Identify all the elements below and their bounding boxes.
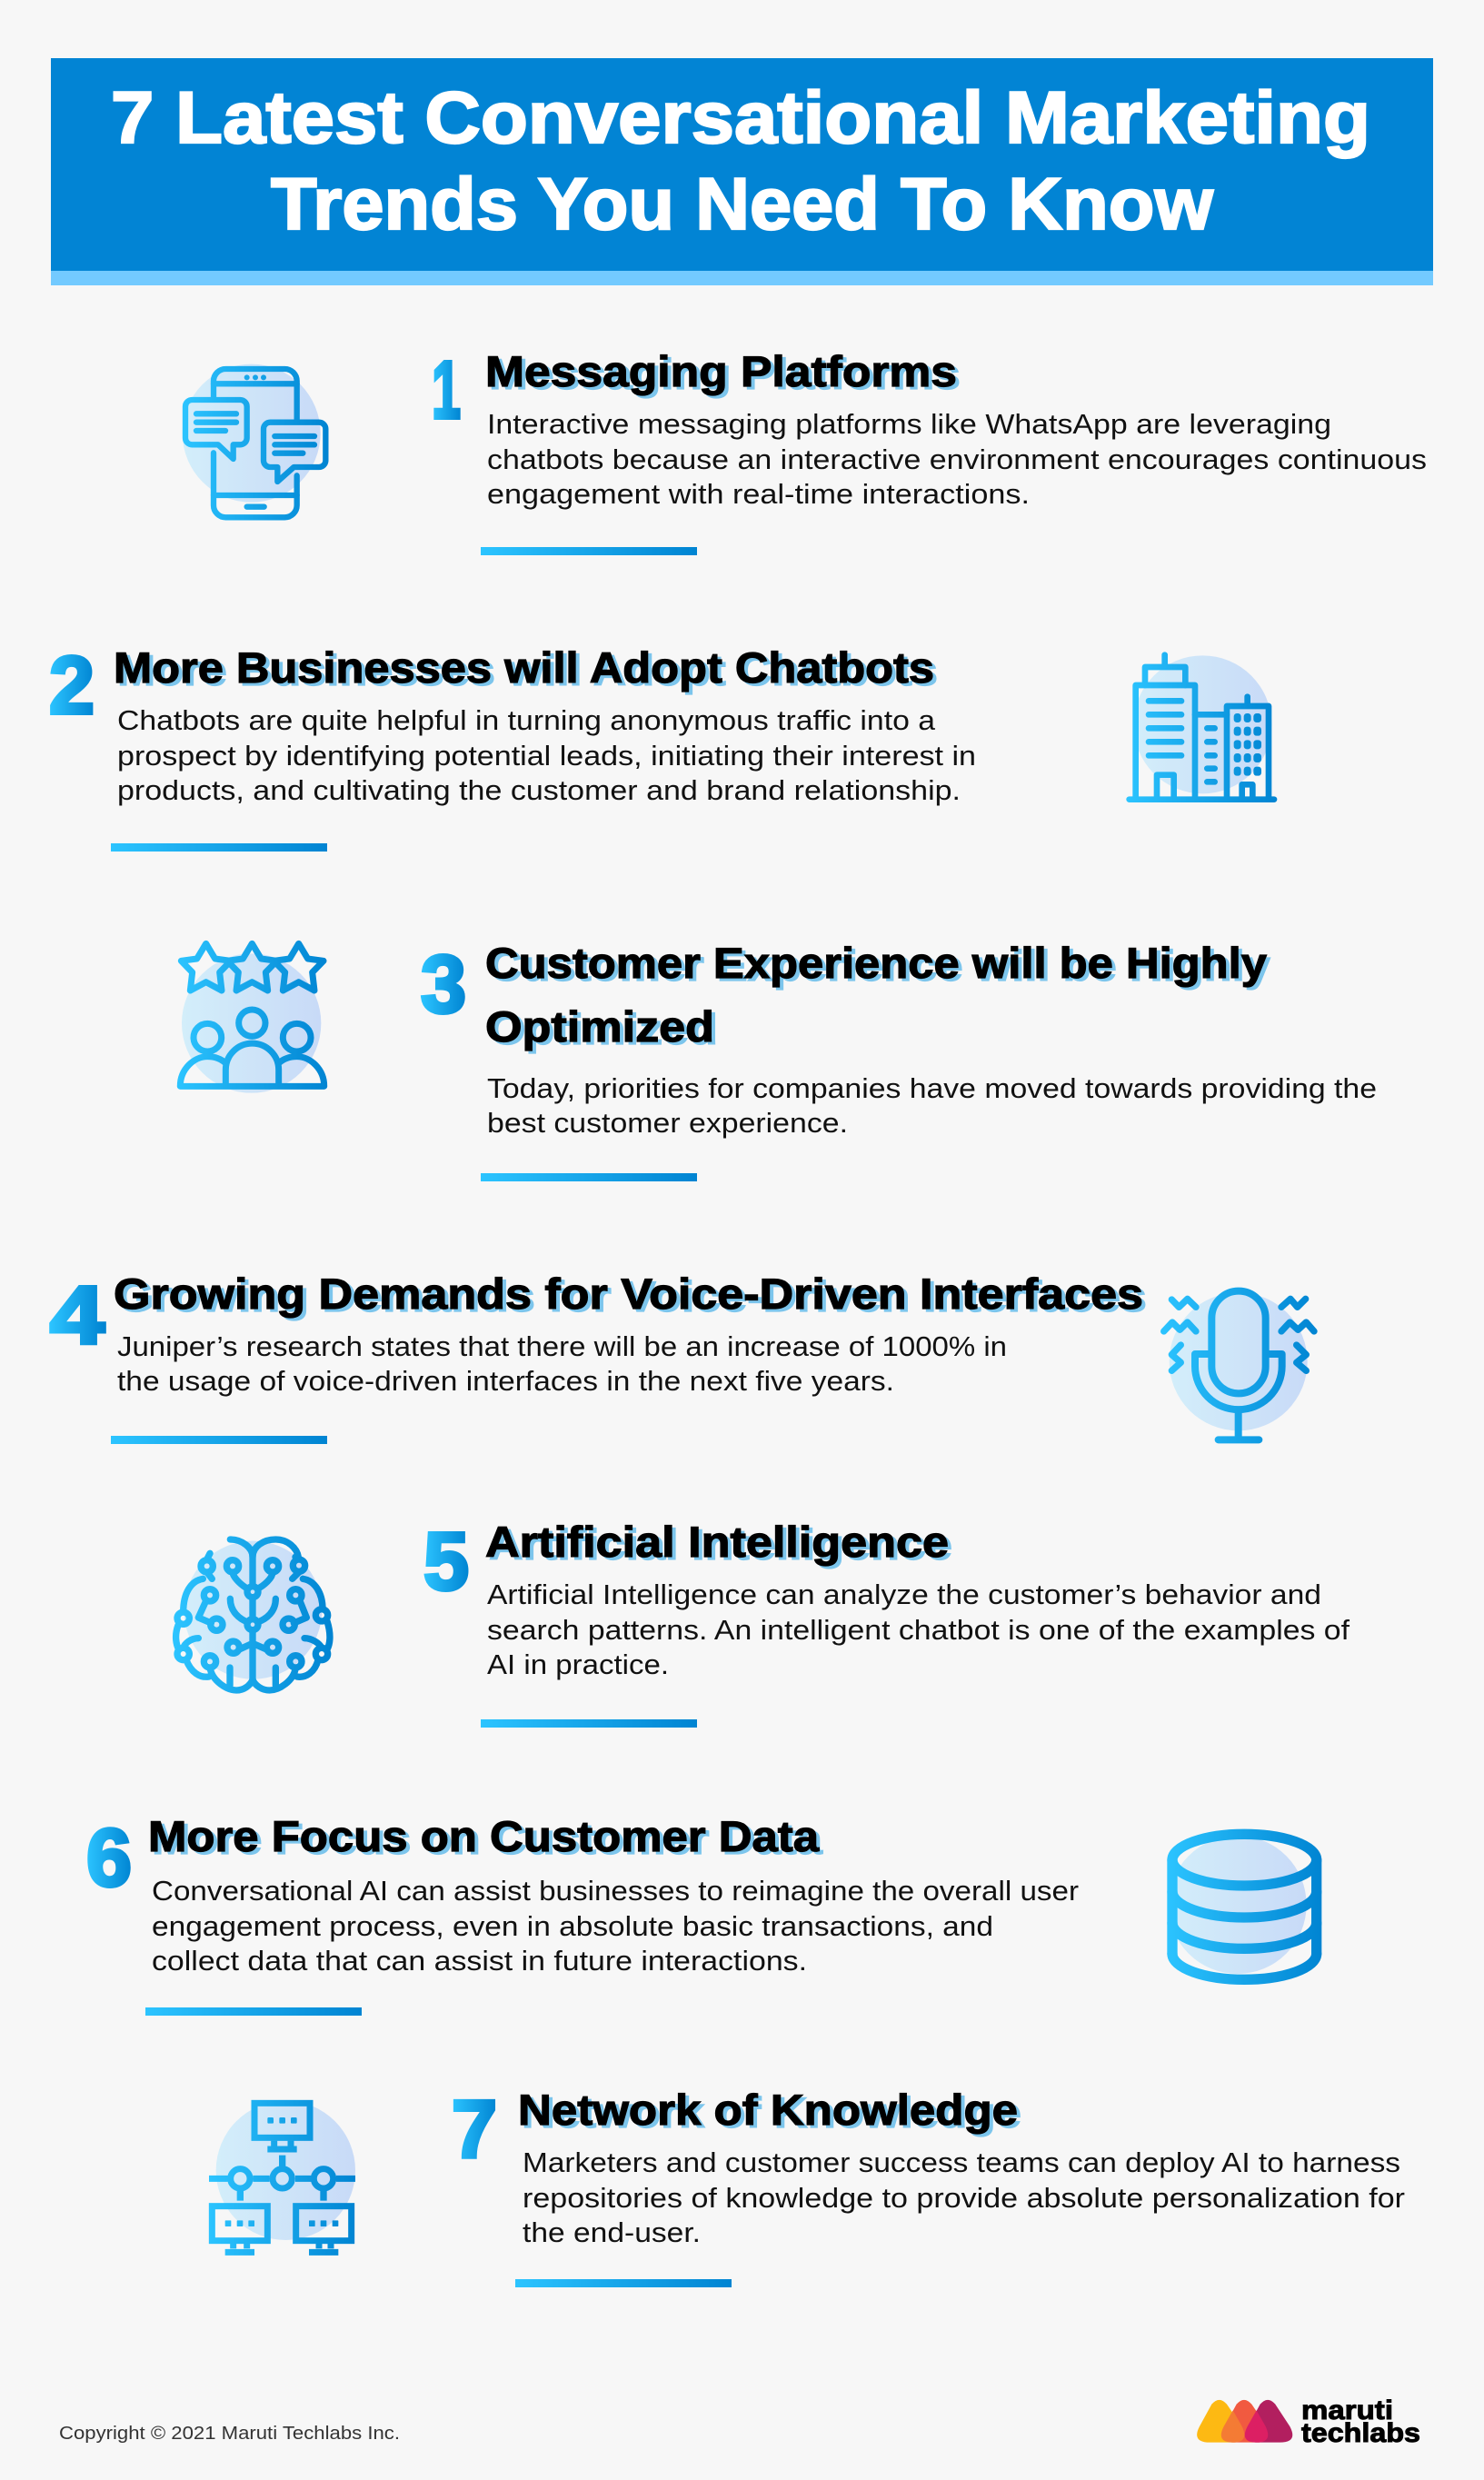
body text: the end-user. — [523, 2216, 701, 2248]
number 7: 7 — [452, 2085, 497, 2176]
body text: best customer experience. — [487, 1107, 848, 1139]
body text — [117, 704, 976, 806]
icon: circuit brain — [176, 1539, 330, 1690]
body text: engagement process, even in absolute basic transactions, and — [152, 1910, 993, 1942]
body text: prospect by identifying potential leads, initiating their interest in — [117, 740, 976, 772]
panel: trend 7 network of knowledge — [209, 2085, 1405, 2287]
underline bar — [111, 843, 327, 852]
underline bar — [111, 1436, 327, 1444]
panel: trend 6 customer data — [86, 1812, 1317, 2016]
number 6: 6 — [86, 1813, 132, 1904]
heading: More Businesses will Adopt Chatbots — [114, 643, 934, 692]
logo mark: three drops — [1197, 2400, 1292, 2443]
body text — [487, 1579, 1350, 1680]
body text: Today, priorities for companies have moved towards providing the — [487, 1072, 1377, 1104]
body text — [117, 1330, 1007, 1397]
panel: trend 5 artificial intelligence — [176, 1517, 1350, 1728]
body text — [152, 1875, 1079, 1977]
body text: Interactive messaging platforms like WhatsApp are leveraging — [487, 408, 1331, 440]
body text: Marketers and customer success teams can deploy AI to harness — [523, 2146, 1400, 2178]
underline bar — [481, 547, 697, 555]
body text — [487, 1072, 1377, 1139]
icon: phone with chat bubbles — [183, 364, 325, 517]
body text: products, and cultivating the customer and brand relationship. — [117, 774, 961, 806]
title banner — [51, 58, 1433, 285]
icon: database cylinder — [1169, 1834, 1317, 1979]
heading: Network of Knowledge — [518, 2086, 1018, 2134]
underline bar — [481, 1719, 697, 1728]
panel: trend 4 voice-driven interfaces — [50, 1270, 1314, 1444]
icon: three stars and people — [180, 943, 324, 1093]
icon: microphone — [1164, 1291, 1314, 1439]
number 4: 4 — [50, 1270, 105, 1361]
icon: office buildings — [1130, 655, 1274, 800]
icon: networked monitors — [209, 2101, 355, 2252]
body text — [523, 2146, 1405, 2248]
heading — [485, 939, 1267, 1051]
heading: Optimized — [485, 1002, 714, 1051]
heading: Growing Demands for Voice-Driven Interfaces — [114, 1270, 1143, 1318]
body text: Conversational AI can assist businesses to reimagine the overall user — [152, 1875, 1079, 1907]
heading: Messaging Platforms — [485, 347, 957, 395]
logo wordmark — [1301, 2395, 1420, 2448]
heading: Artificial Intelligence — [485, 1518, 949, 1566]
logo wordmark: maruti — [1301, 2395, 1393, 2425]
body text: repositories of knowledge to provide absolute personalization for — [523, 2182, 1405, 2214]
body text: Juniper’s research states that there will be an increase of 1000% in — [117, 1330, 1007, 1362]
title: 7 Latest Conversational Marketing — [111, 77, 1370, 159]
body text: collect data that can assist in future interactions. — [152, 1945, 807, 1977]
body text: chatbots because an interactive environment encourages continuous — [487, 443, 1427, 475]
logo wordmark: techlabs — [1301, 2418, 1420, 2448]
number 3: 3 — [421, 940, 466, 1031]
underline bar — [145, 2007, 362, 2016]
number 2: 2 — [49, 641, 95, 732]
heading: More Focus on Customer Data — [148, 1812, 820, 1860]
body text: the usage of voice-driven interfaces in the next five years. — [117, 1365, 894, 1397]
logo: maruti techlabs — [1197, 2395, 1420, 2448]
body text: AI in practice. — [487, 1648, 669, 1680]
body text: engagement with real-time interactions. — [487, 478, 1030, 510]
body text — [487, 408, 1427, 510]
underline bar — [515, 2279, 732, 2287]
panel: trend 3 customer experience — [180, 939, 1377, 1181]
panel: trend 2 more businesses will adopt chatbots — [49, 641, 1274, 852]
copyright footer: Copyright © 2021 Maruti Techlabs Inc. — [59, 2424, 400, 2444]
title: Trends You Need To Know — [271, 164, 1214, 245]
number 5: 5 — [423, 1517, 469, 1608]
heading: Customer Experience will be Highly — [485, 939, 1267, 987]
number 1: 1 — [432, 345, 461, 436]
body text: search patterns. An intelligent chatbot is one of the examples of — [487, 1614, 1350, 1646]
body text: Artificial Intelligence can analyze the customer’s behavior and — [487, 1579, 1321, 1610]
title — [111, 77, 1370, 245]
underline bar — [481, 1173, 697, 1181]
panel: trend 1 messaging platforms — [183, 345, 1427, 555]
body text: Chatbots are quite helpful in turning anonymous traffic into a — [117, 704, 936, 736]
